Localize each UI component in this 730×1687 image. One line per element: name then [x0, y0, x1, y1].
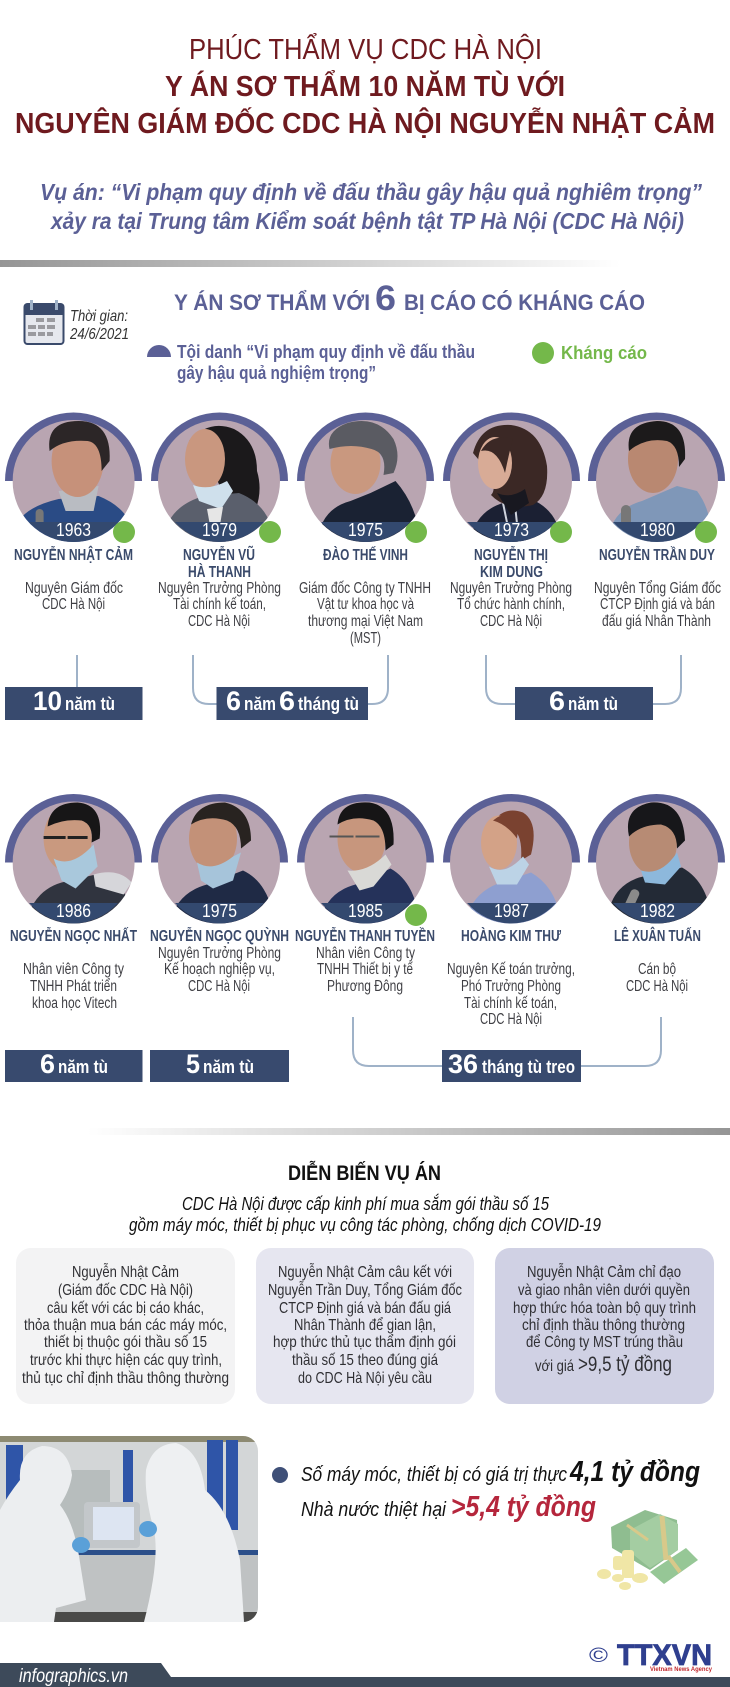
panel: defendant Nguyễn Ngọc Quỳnh	[150, 794, 289, 995]
panel: defendant Nguyễn Ngọc Nhất: 1986	[56, 901, 91, 921]
sentence: 36 months suspended: tháng tù treo	[482, 1057, 575, 1077]
subtitle	[40, 179, 702, 234]
panel: defendant Nguyễn Thị Kim Dung: CDC Hà Nội	[480, 613, 542, 630]
stat: real value: 4,1 tỷ đồng	[569, 1456, 700, 1488]
date text: 24/6/2021	[69, 326, 129, 343]
section heading: verdict	[174, 279, 645, 318]
sentence: 6 years 6 months	[193, 655, 388, 720]
panel: step 3: Nguyễn Nhật Cảm chỉ đạo	[527, 1262, 681, 1281]
panel: defendant Hoàng Kim Thư: 1987	[494, 901, 529, 921]
panel: defendant Nguyễn Trần Duy	[588, 412, 725, 630]
panel: defendant Lê Xuân Tuấn: Cán bộ	[638, 961, 676, 978]
stat: state losses: Nhà nước thiệt hại	[301, 1499, 446, 1521]
section heading: verdict: BỊ CÁO CÓ KHÁNG CÁO	[404, 290, 645, 315]
icon: money and coins	[597, 1510, 698, 1590]
panel: defendant Nguyễn Ngọc Nhất: NGUYỄN NGỌC NHẤT	[10, 926, 137, 945]
panel: defendant Đào Thế Vinh: (MST)	[350, 630, 381, 647]
photo: lab technicians	[0, 1436, 258, 1622]
footer	[0, 1663, 730, 1687]
panel: step 1: thủ tục chỉ định thầu thông thường	[22, 1370, 229, 1387]
panel: defendant Đào Thế Vinh: 1975	[348, 520, 383, 540]
logo: TTXVN: ©	[589, 1645, 608, 1667]
panel: step 2: Nguyễn Nhật Cảm câu kết với	[278, 1262, 452, 1281]
legend: charge: Tội danh “Vi phạm quy định về đấu thầu	[177, 342, 475, 362]
panel: step 3: với giá	[535, 1358, 574, 1375]
panel: defendant Lê Xuân Tuấn: 1982	[640, 901, 675, 921]
panel: defendant Đào Thế Vinh: Giám đốc Công ty TNHH	[299, 580, 431, 597]
stat: real value	[301, 1456, 700, 1488]
section heading: verdict: 6	[375, 279, 396, 318]
sentence: 6 years 6 months: 6	[226, 686, 241, 716]
panel: defendant Nguyễn Ngọc Quỳnh: Kế hoạch nghiệp vụ,	[164, 961, 275, 978]
panel: defendant Nguyễn Thị Kim Dung: Nguyên Trưởng Phòng	[450, 580, 572, 597]
panel: step 3: chỉ định thầu thông thường	[522, 1317, 685, 1334]
logo: TTXVN: TTXVN	[617, 1639, 712, 1672]
intro text: CDC Hà Nội được cấp kinh phí mua sắm gói thầu số 15	[182, 1194, 550, 1214]
intro text	[129, 1194, 601, 1235]
footer: infographics.vn	[19, 1666, 128, 1687]
panel: defendant Nguyễn Thị Kim Dung: Tổ chức hành chính,	[457, 596, 565, 613]
panel: defendant Đào Thế Vinh	[297, 412, 434, 647]
intro text: gồm máy móc, thiết bị phục vụ công tác phòng, chống dịch COVID-19	[129, 1215, 601, 1235]
panel: defendant Nguyễn Thanh Tuyền: TNHH Thiết bị y tế	[317, 961, 413, 978]
panel: step 3: hợp thức hóa toàn bộ quy trình	[513, 1300, 696, 1317]
panel: defendant Nguyễn Vũ Hà Thanh: Tài chính kế toán,	[173, 596, 266, 613]
panel: defendant Lê Xuân Tuấn: LÊ XUÂN TUẤN	[614, 926, 701, 945]
panel: step 2: thầu số 15 theo đúng giá	[292, 1352, 438, 1369]
sentence: 36 months suspended	[353, 1017, 661, 1082]
panel: defendant Nguyễn Vũ Hà Thanh	[151, 412, 288, 630]
panel: defendant Nguyễn Vũ Hà Thanh: NGUYỄN VŨ	[183, 544, 255, 564]
sentence: 10 years: 10	[33, 686, 62, 716]
panel: defendant Nguyễn Vũ Hà Thanh: 1979	[202, 520, 237, 540]
panel: defendant Lê Xuân Tuấn: CDC Hà Nội	[626, 978, 688, 995]
date text: Thời gian:	[70, 308, 128, 325]
panel: step 1: thiết bị thuộc gói thầu số 15	[44, 1334, 207, 1351]
panel: defendant Nguyễn Ngọc Nhất: khoa học Vitech	[32, 995, 117, 1012]
panel: step 3: để Công ty MST trúng thầu	[526, 1333, 683, 1351]
panel: step 2: Nhân Thành để gian lận,	[294, 1316, 436, 1334]
icon: calendar	[24, 300, 64, 344]
section heading: verdict: Y ÁN SƠ THẨM VỚI	[174, 290, 370, 315]
panel: step 2: CTCP Định giá và bán đấu giá	[279, 1300, 451, 1317]
stat: state losses	[301, 1491, 596, 1523]
panel: defendant Nguyễn Thị Kim Dung: KIM DUNG	[480, 564, 543, 581]
panel: defendant Nguyễn Ngọc Quỳnh: NGUYỄN NGỌC QUỲNH	[150, 926, 289, 945]
sentence: 10 years: năm tù	[65, 694, 115, 714]
panel: defendant Đào Thế Vinh: thương mại Việt Nam	[308, 613, 423, 630]
panel: step 1	[16, 1248, 235, 1404]
panel: defendant Nguyễn Nhật Cảm: CDC Hà Nội	[42, 596, 105, 613]
panel: defendant Hoàng Kim Thư	[443, 794, 580, 1028]
panel: defendant Nguyễn Thị Kim Dung	[443, 412, 580, 630]
legend: appeal	[532, 342, 647, 364]
panel: step 3: >9,5 tỷ đồng	[578, 1353, 672, 1376]
panel: step 2	[256, 1248, 474, 1404]
panel: defendant Nguyễn Thị Kim Dung: 1973	[494, 520, 529, 540]
panel: defendant Hoàng Kim Thư: Nguyên Kế toán trưởng,	[447, 961, 575, 978]
sentence: 6 years 6 months: tháng tù	[298, 694, 359, 714]
bullet icon	[272, 1467, 288, 1483]
logo: TTXVN: Vietnam News Agency	[650, 1667, 713, 1673]
panel: defendant Hoàng Kim Thư: Phó Trưởng Phòng	[461, 978, 561, 995]
date text	[69, 308, 129, 343]
panel: defendant Nguyễn Ngọc Quỳnh: CDC Hà Nội	[188, 978, 250, 995]
sentence: 5 years	[150, 1049, 289, 1082]
panel: defendant Nguyễn Ngọc Quỳnh: Nguyên Trưởng Phòng	[158, 945, 281, 962]
panel: step 1: (Giám đốc CDC Hà Nội)	[58, 1282, 193, 1299]
panel: defendant Nguyễn Nhật Cảm: NGUYỄN NHẬT CẢM	[14, 545, 133, 564]
panel: step 2: do CDC Hà Nội yêu cầu	[298, 1370, 432, 1387]
sentence: 6 years 6 months: năm	[244, 694, 276, 714]
panel: defendant Nguyễn Nhật Cảm: Nguyên Giám đốc	[25, 580, 123, 597]
stat: state losses: >5,4 tỷ đồng	[451, 1491, 596, 1523]
panel: defendant Nguyễn Nhật Cảm: 1963	[56, 520, 91, 540]
sentence: 5 years: 5	[186, 1049, 200, 1079]
title: PHÚC THẨM VỤ CDC HÀ NỘI	[189, 32, 542, 66]
panel: defendant Nguyễn Thanh Tuyền: NGUYỄN THANH TUYỀN	[295, 926, 435, 945]
sentence: 6 years 6 months: 6	[279, 686, 295, 716]
panel: defendant Nguyễn Ngọc Nhất: Nhân viên Công ty	[23, 961, 124, 978]
panel: defendant Nguyễn Thị Kim Dung: NGUYỄN THỊ	[474, 545, 548, 564]
panel: step 1: trước khi thực hiện các quy trình,	[30, 1352, 222, 1369]
legend: charge: gây hậu quả nghiệm trọng”	[177, 363, 376, 383]
sentence: 10 years	[5, 655, 142, 720]
panel: defendant Lê Xuân Tuấn	[588, 794, 725, 995]
panel: defendant Nguyễn Vũ Hà Thanh: Nguyên Trưởng Phòng	[158, 580, 281, 597]
legend: charge	[147, 342, 475, 383]
panel: defendant Nguyễn Nhật Cảm	[5, 412, 142, 613]
panel: defendant Hoàng Kim Thư: CDC Hà Nội	[480, 1011, 542, 1028]
sentence: 6 years (Nhất): 6	[40, 1049, 55, 1079]
panel: step 2: hợp thức thủ tục thẩm định gói	[273, 1333, 456, 1351]
subtitle: xảy ra tại Trung tâm Kiểm soát bệnh tật TP Hà Nội (CDC Hà Nội)	[49, 208, 684, 234]
heading: case progress: DIỄN BIẾN VỤ ÁN	[288, 1162, 441, 1185]
panel: defendant Nguyễn Thanh Tuyền: 1985	[348, 901, 383, 921]
title	[15, 32, 715, 140]
panel: step 1: câu kết với các bị cáo khác,	[47, 1300, 204, 1317]
sentence: 6 years (Nhất)	[5, 1049, 142, 1082]
panel: defendant Nguyễn Thanh Tuyền	[295, 794, 435, 995]
legend: appeal: Kháng cáo	[561, 343, 647, 363]
sentence: 6 years: năm tù	[568, 694, 618, 714]
sentence: 6 years (Nhất): năm tù	[58, 1057, 108, 1077]
panel: defendant Nguyễn Thanh Tuyền: Phương Đông	[327, 978, 403, 995]
panel: defendant Hoàng Kim Thư: Tài chính kế toán,	[464, 995, 557, 1012]
panel: defendant Nguyễn Vũ Hà Thanh: HÀ THANH	[188, 562, 251, 581]
panel: defendant Đào Thế Vinh: ĐÀO THẾ VINH	[323, 545, 408, 564]
panel: defendant Nguyễn Ngọc Nhất	[5, 794, 142, 1012]
panel: defendant Nguyễn Ngọc Nhất: TNHH Phát triển	[30, 978, 117, 995]
panel: step 1: Nguyễn Nhật Cảm	[72, 1262, 179, 1281]
panel: step 3: và giao nhân viên dưới quyền	[518, 1282, 690, 1299]
panel: defendant Hoàng Kim Thư: HOÀNG KIM THƯ	[461, 926, 562, 945]
sentence: 36 months suspended: 36	[448, 1049, 478, 1079]
sentence: 5 years: năm tù	[203, 1057, 254, 1077]
panel: defendant Đào Thế Vinh: Vật tư khoa học và	[317, 596, 414, 613]
title: Y ÁN SƠ THẨM 10 NĂM TÙ VỚI	[165, 69, 565, 103]
panel: defendant Nguyễn Trần Duy: 1980	[640, 520, 675, 540]
panel: defendant Nguyễn Thanh Tuyền: Nhân viên Công ty	[316, 945, 415, 962]
panel: defendant Nguyễn Ngọc Quỳnh: 1975	[202, 901, 237, 921]
panel: defendant Nguyễn Vũ Hà Thanh: CDC Hà Nội	[188, 613, 250, 630]
stat: real value: Số máy móc, thiết bị có giá trị thực	[301, 1464, 567, 1486]
panel: step 3	[495, 1248, 714, 1404]
sentence: 6 years	[486, 655, 681, 720]
panel: step 2: Nguyễn Trần Duy, Tổng Giám đốc	[268, 1280, 462, 1299]
panel: step 1: thỏa thuận mua bán các máy móc,	[24, 1317, 227, 1334]
sentence: 6 years: 6	[549, 686, 565, 716]
